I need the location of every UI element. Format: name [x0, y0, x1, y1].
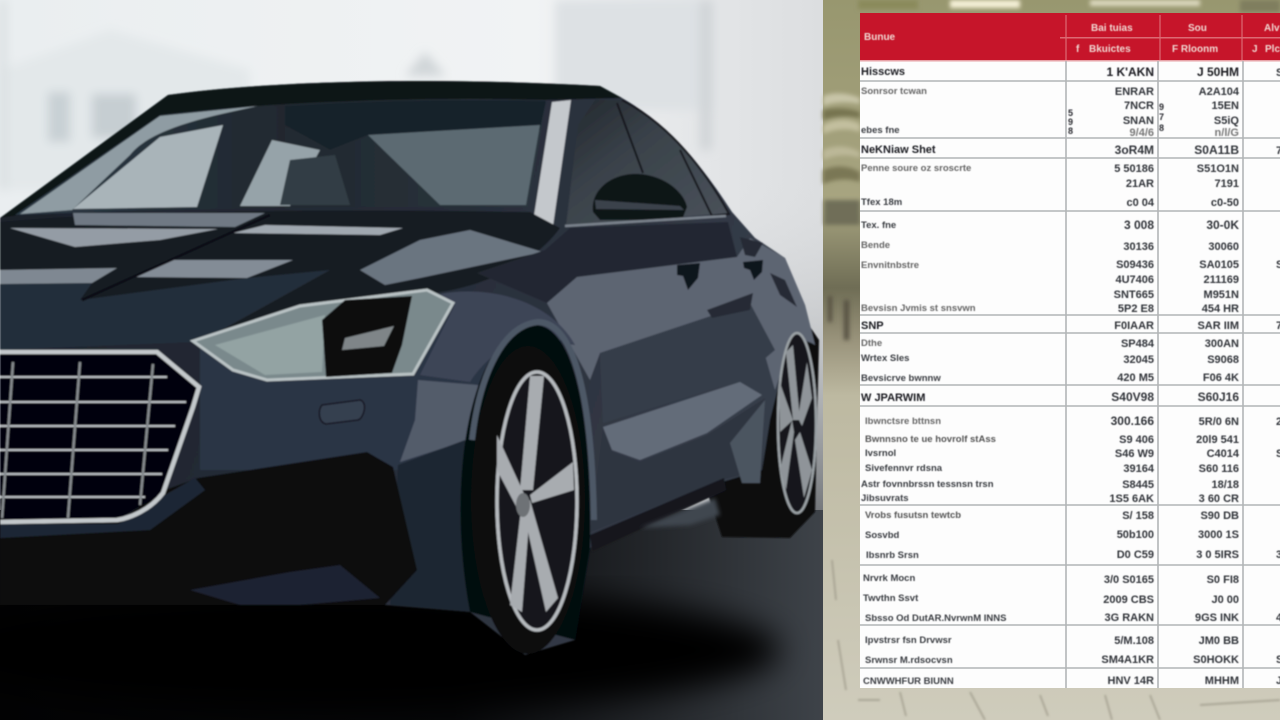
- passenger window reflection: [240, 140, 320, 206]
- second number column: 3 60 CR: [1199, 493, 1239, 505]
- first number column: S09436: [1116, 259, 1154, 271]
- second number column: SA0105: [1199, 259, 1239, 271]
- door dark band: [477, 222, 737, 303]
- row labels: Sonrsor tcwan: [861, 86, 927, 97]
- first number column: 2009 CBS: [1103, 594, 1154, 606]
- row labels: Jibsuvrats: [861, 493, 909, 504]
- second number column: 9GS INK: [1195, 612, 1239, 624]
- row labels: SNP: [861, 320, 884, 332]
- row labels: Ibsnrb Srsn: [866, 550, 919, 561]
- table header: [860, 13, 1280, 62]
- first number column: [1101, 65, 1155, 687]
- showroom background with buildings: [0, 0, 823, 540]
- lower fender: [390, 440, 470, 612]
- vertical marks: 8: [1159, 123, 1164, 133]
- roof: [0, 81, 622, 218]
- table header: Plc: [1265, 44, 1280, 55]
- second number column: S5iQ: [1214, 115, 1239, 127]
- front wheel: [471, 346, 585, 654]
- second number column: S0A11B: [1194, 143, 1239, 157]
- second number column: 18/18: [1211, 479, 1239, 491]
- second number column: J 50HM: [1197, 65, 1239, 79]
- first number column: SNT665: [1114, 289, 1154, 301]
- second number column: F06 4K: [1203, 372, 1239, 384]
- vertical marks: 7: [1159, 112, 1164, 122]
- textured side panel: [823, 0, 1280, 720]
- row labels: Ivsrnol: [865, 448, 896, 459]
- wing mirror: [593, 174, 687, 220]
- first number column: 30136: [1123, 241, 1154, 253]
- row labels: Hisscws: [861, 66, 905, 78]
- windshield reflection: [73, 125, 223, 209]
- row labels: Bwnnsno te ue hovrolf stAss: [865, 434, 996, 445]
- first number column: 420 M5: [1117, 372, 1154, 384]
- row labels: Envnitnbstre: [861, 260, 919, 271]
- first number column: 3oR4M: [1115, 143, 1154, 157]
- rear wheel: [778, 333, 816, 513]
- row labels: [861, 66, 1006, 687]
- second number column: A2A104: [1199, 86, 1240, 98]
- second number column: S51O1N: [1197, 163, 1239, 175]
- table header: Sou: [1188, 23, 1207, 34]
- table sheet: [860, 13, 1280, 688]
- car: [0, 81, 819, 655]
- first number column: 3 008: [1124, 218, 1154, 232]
- first number column: 5P2 E8: [1118, 303, 1154, 315]
- row labels: Nrvrk Mocn: [863, 573, 915, 584]
- belt line: [565, 216, 726, 226]
- row labels: Bevsisn Jvmis st snsvwn: [861, 303, 976, 314]
- first number column: 39164: [1123, 463, 1155, 475]
- first number column: SM4A1KR: [1101, 654, 1154, 666]
- washer cover: [319, 400, 364, 424]
- table header: Bkuictes: [1089, 44, 1131, 55]
- headlight: [193, 290, 453, 380]
- first number column: 3/0 S0165: [1104, 574, 1154, 586]
- hood lower blue band: [0, 270, 330, 350]
- row labels: Srwnsr M.rdsocvsn: [865, 655, 953, 666]
- first number column: 7NCR: [1124, 100, 1154, 112]
- second number column: S0HOKK: [1193, 654, 1239, 666]
- table header: F Rloonm: [1172, 44, 1218, 55]
- front fender: [200, 292, 575, 470]
- row labels: Tex. fne: [861, 220, 896, 231]
- row labels: ebes fne: [861, 125, 900, 136]
- second number column: M951N: [1204, 289, 1239, 301]
- row labels: Vrobs fusutsn tewtcb: [865, 510, 961, 521]
- table header: f: [1076, 44, 1080, 55]
- row labels: Wrtex Sles: [861, 353, 909, 364]
- sill: [590, 398, 765, 532]
- second number column: 3 0 5IRS: [1196, 549, 1239, 561]
- first number column: HNV 14R: [1108, 675, 1154, 687]
- second number column: 15EN: [1211, 100, 1239, 112]
- door lower reflection: [603, 382, 762, 460]
- floor: [0, 510, 823, 720]
- first number column: 5 50186: [1114, 163, 1154, 175]
- arch lip: [472, 322, 594, 520]
- first number column: 50b100: [1117, 529, 1154, 541]
- second number column: S9068: [1207, 354, 1239, 366]
- hood highlights: [0, 213, 543, 300]
- table header: Bunue: [864, 32, 896, 43]
- vertical marks: 9: [1159, 102, 1164, 112]
- rear window reflection: [368, 125, 540, 205]
- fender lower light: [400, 380, 478, 462]
- first number column: 1 K'AKN: [1106, 65, 1154, 79]
- first number column: 32045: [1123, 354, 1154, 366]
- grille: [0, 352, 199, 522]
- table: [860, 13, 1280, 688]
- first number column: 5/M.108: [1114, 635, 1154, 647]
- row labels: Astr fovnnbrssn tessnsn trsn: [861, 479, 994, 490]
- first number column: D0 C59: [1117, 549, 1154, 561]
- first number column: SNAN: [1123, 115, 1154, 127]
- vertical marks: [1068, 102, 1164, 136]
- second number column: 30-0K: [1206, 218, 1239, 232]
- row labels: W JPARWIM: [861, 392, 925, 404]
- first number column: S/ 158: [1122, 510, 1154, 522]
- row labels: Ibwnctsre bttnsn: [865, 416, 941, 427]
- hood: [0, 210, 560, 350]
- first number column: 21AR: [1126, 178, 1154, 190]
- second number column: S90 DB: [1200, 510, 1239, 522]
- grid lines: [860, 61, 1280, 688]
- first number column: F0IAAR: [1114, 320, 1154, 332]
- first number column: 9/4/6: [1130, 127, 1154, 139]
- second number column: S0 FI8: [1207, 574, 1239, 586]
- row labels: Dthe: [861, 338, 882, 349]
- windshield: [15, 100, 546, 215]
- row labels: Tfex 18m: [861, 197, 902, 208]
- table header: Alv: [1264, 23, 1280, 34]
- row labels: CNWWHFUR BIUNN: [863, 676, 954, 687]
- row labels: Sbsso Od DutAR.NvrwnM INNS: [865, 613, 1006, 624]
- second number column: SAR IIM: [1197, 320, 1239, 332]
- pillar reflection: [20, 106, 258, 214]
- first number column: S8445: [1122, 479, 1154, 491]
- row labels: Bevsicrve bwnnw: [861, 373, 941, 384]
- bumper strip below grille: [0, 478, 205, 538]
- second number column: 300AN: [1205, 338, 1239, 350]
- row labels: Twvthn Ssvt: [863, 593, 919, 604]
- floor light under sill: [640, 498, 720, 528]
- car body: [0, 81, 815, 655]
- vertical marks: 9: [1068, 117, 1073, 127]
- door upper reflection: [547, 238, 815, 390]
- side glass: [566, 100, 728, 226]
- third number column, cropped: [1276, 67, 1280, 687]
- row labels: Penne soure oz sroscrte: [861, 163, 971, 174]
- rear tyre: [700, 312, 819, 538]
- first number column: 4U7406: [1115, 274, 1154, 286]
- second number column: 3000 1S: [1198, 529, 1239, 541]
- first number column: S46 W9: [1115, 448, 1154, 460]
- table header: Bai tuias: [1091, 23, 1133, 34]
- row labels: NeKNiaw Shet: [861, 144, 936, 156]
- second number column: 30060: [1208, 241, 1239, 253]
- windshield sun strip: [285, 100, 546, 150]
- first number column: S9 406: [1119, 434, 1154, 446]
- seat: [280, 155, 350, 205]
- second number column: 7191: [1215, 178, 1239, 190]
- second number column: 5R/0 6N: [1199, 416, 1239, 428]
- rear quarter shadows: [707, 237, 797, 318]
- a pillar: [533, 100, 571, 226]
- table header: J: [1252, 44, 1258, 55]
- second number column: MHHM: [1205, 675, 1239, 687]
- first number column: SP484: [1121, 338, 1155, 350]
- row labels: Sosvbd: [865, 530, 900, 541]
- bumper lip: [190, 565, 380, 605]
- car shadow: [0, 588, 780, 712]
- window pillar and frame: [617, 100, 729, 216]
- second number column: S60J16: [1198, 390, 1239, 404]
- front wheel arch: [460, 325, 590, 640]
- second number column: S60 116: [1199, 463, 1239, 475]
- first number column: 300.166: [1111, 414, 1154, 428]
- mudflap: [730, 400, 765, 483]
- second number column: 454 HR: [1202, 303, 1239, 315]
- vertical marks: 5: [1068, 108, 1073, 118]
- second number column: C4014: [1207, 448, 1240, 460]
- door handles: [677, 260, 763, 290]
- second number column: 211169: [1204, 274, 1239, 286]
- second number column: JM0 BB: [1199, 635, 1239, 647]
- second number column: [1193, 65, 1240, 687]
- first number column: 1S5 6AK: [1109, 493, 1154, 505]
- second number column: J0 00: [1211, 594, 1239, 606]
- first number column: 3G RAKN: [1104, 612, 1154, 624]
- lower bumper: [0, 452, 417, 605]
- first number column: S40V98: [1111, 390, 1154, 404]
- second number column: 20l9 541: [1196, 434, 1239, 446]
- second number column: n/l/G: [1215, 127, 1239, 139]
- fender upper tone: [420, 292, 575, 382]
- first number column: c0 04: [1126, 197, 1155, 209]
- row labels: Ipvstrsr fsn Drvwsr: [865, 635, 952, 646]
- vertical marks: 8: [1068, 126, 1073, 136]
- second number column: c0-50: [1211, 197, 1239, 209]
- row labels: Sivefennvr rdsna: [865, 463, 943, 474]
- row labels: Bende: [861, 240, 890, 251]
- door mid band: [600, 303, 775, 423]
- first number column: ENRAR: [1115, 86, 1154, 98]
